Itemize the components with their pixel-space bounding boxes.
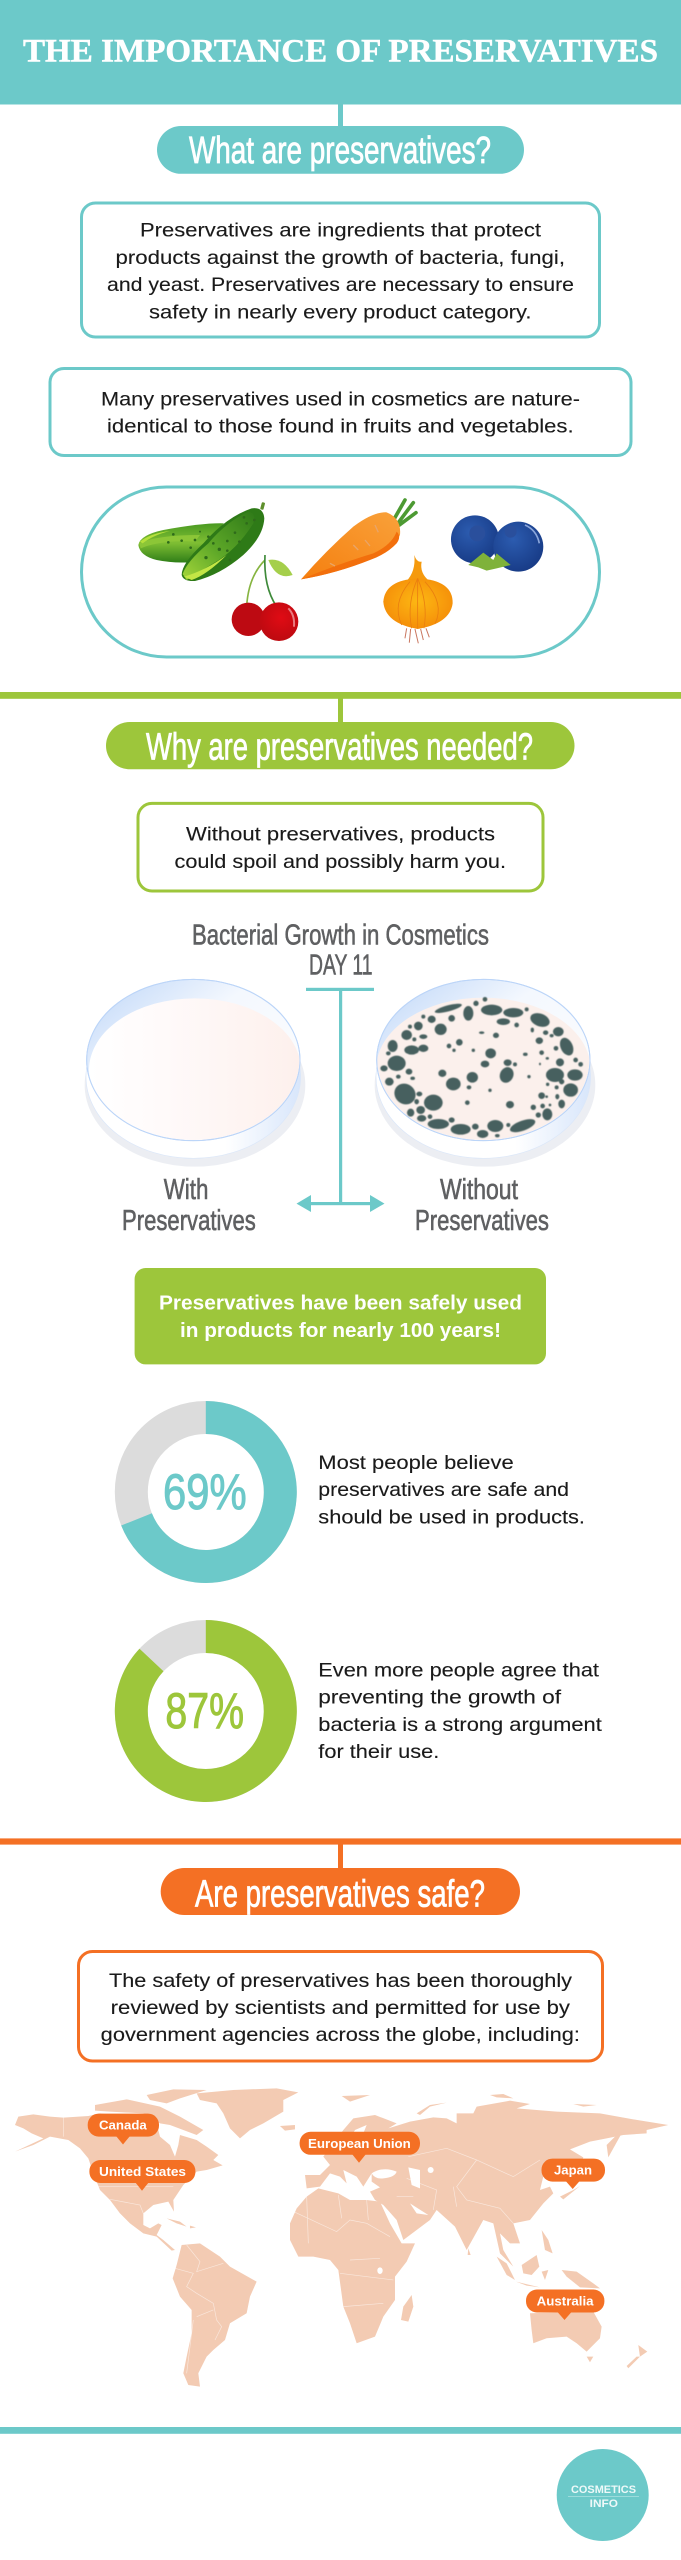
petri dish: without preservatives bbox=[375, 979, 595, 1167]
panel: definition text: Preservatives are ingredients that protect bbox=[140, 220, 542, 242]
chart heading: bacterial growth: Bacterial Growth in Cosmetics bbox=[192, 919, 489, 951]
divider: teal footer line bbox=[0, 2427, 681, 2434]
chart heading: bacterial growth bbox=[192, 919, 489, 982]
panel: definition text: products against the growth of bacteria, fungi, bbox=[116, 247, 565, 269]
icon: carrot bbox=[301, 500, 416, 579]
callout: nearly 100 years: in products for nearly 100 years! bbox=[180, 1320, 501, 1342]
text: most people believe: Most people believe bbox=[318, 1452, 514, 1474]
header banner bbox=[0, 0, 681, 104]
map: americas bbox=[15, 2088, 298, 2387]
text: even more people agree: for their use. bbox=[318, 1741, 439, 1763]
divider: green section line bbox=[0, 692, 681, 699]
section heading: why are preservatives needed bbox=[106, 698, 574, 769]
logo: cosmetics info: COSMETICS bbox=[571, 2484, 636, 2496]
text: most people believe: preservatives are safe and bbox=[318, 1479, 569, 1501]
title: THE IMPORTANCE OF PRESERVATIVES bbox=[23, 34, 658, 70]
divider: orange section line bbox=[0, 1838, 681, 1845]
panel: definition text bbox=[82, 203, 600, 337]
donut chart: 87% bbox=[115, 1620, 297, 1802]
label: with preservatives: With bbox=[164, 1174, 208, 1206]
section heading: what are preservatives bbox=[157, 104, 524, 174]
label: without preservatives bbox=[415, 1174, 549, 1237]
donut chart: 87%: 87% bbox=[165, 1683, 244, 1739]
map label: United States: United States bbox=[99, 2164, 186, 2179]
panel: spoil warning text: could spoil and possibly harm you. bbox=[174, 851, 506, 873]
panel: definition text: and yeast. Preservatives are necessary to ensure bbox=[107, 274, 574, 296]
section heading: are preservatives safe: Are preservatives safe? bbox=[195, 1874, 485, 1916]
icon: blueberries bbox=[451, 515, 543, 572]
map label: Australia bbox=[526, 2290, 604, 2320]
donut chart: 69% bbox=[121, 1401, 297, 1583]
petri dish: with preservatives bbox=[85, 979, 305, 1167]
panel: spoil warning text bbox=[138, 803, 543, 891]
section heading: what are preservatives: What are preservatives? bbox=[189, 130, 491, 172]
text: most people believe bbox=[318, 1452, 585, 1528]
label: with preservatives: Preservatives bbox=[122, 1205, 256, 1237]
map: eurasia africa oceania bbox=[290, 2094, 668, 2368]
icon: cucumbers bbox=[138, 502, 265, 581]
map label: Australia: Australia bbox=[537, 2294, 594, 2308]
callout: nearly 100 years bbox=[135, 1268, 546, 1364]
arrow: comparison divider bbox=[296, 988, 384, 1212]
panel: safety review text: reviewed by scientists and permitted for use by bbox=[111, 1997, 570, 2019]
map: inland seas bbox=[343, 2125, 434, 2274]
map label: European Union: European Union bbox=[308, 2136, 411, 2151]
panel: nature-identical text bbox=[50, 368, 631, 456]
logo: cosmetics info bbox=[557, 2449, 649, 2541]
label: without preservatives: Without bbox=[440, 1174, 518, 1206]
text: even more people agree: bacteria is a strong argument bbox=[318, 1714, 602, 1736]
chart heading: bacterial growth: DAY 11 bbox=[309, 950, 372, 982]
map label: United States bbox=[89, 2160, 195, 2191]
panel: fruits and vegetables bbox=[82, 487, 600, 657]
map label: Canada: Canada bbox=[99, 2118, 148, 2133]
section heading: why are preservatives needed: Why are preservatives needed? bbox=[146, 726, 533, 768]
text: even more people agree: preventing the growth of bbox=[318, 1687, 562, 1709]
panel: nature-identical text: identical to those found in fruits and vegetables. bbox=[107, 416, 574, 438]
icon: onion bbox=[383, 555, 453, 643]
panel: nature-identical text: Many preservatives used in cosmetics are nature- bbox=[101, 388, 580, 410]
panel: definition text: safety in nearly every product category. bbox=[149, 301, 532, 323]
map label: European Union bbox=[300, 2132, 420, 2163]
icon: cherries bbox=[232, 555, 298, 641]
text: even more people agree: Even more people agree that bbox=[318, 1660, 600, 1682]
map label: Canada bbox=[88, 2114, 159, 2144]
callout: nearly 100 years: Preservatives have been safely used bbox=[159, 1292, 522, 1314]
panel: safety review text: The safety of preservatives has been thoroughly bbox=[109, 1970, 572, 1992]
bacteria colonies bbox=[380, 997, 583, 1138]
donut chart: 69%: 69% bbox=[163, 1464, 247, 1520]
panel: safety review text: government agencies across the globe, including: bbox=[101, 2024, 580, 2046]
label: without preservatives: Preservatives bbox=[415, 1205, 549, 1237]
map label: Japan: Japan bbox=[554, 2163, 592, 2178]
panel: spoil warning text: Without preservatives, products bbox=[186, 824, 495, 846]
label: with preservatives bbox=[122, 1174, 256, 1237]
world map bbox=[15, 2088, 668, 2387]
map label: Japan bbox=[542, 2159, 605, 2189]
logo: cosmetics info: INFO bbox=[590, 2498, 618, 2510]
panel: safety review text bbox=[78, 1952, 602, 2061]
text: even more people agree bbox=[318, 1660, 602, 1763]
text: most people believe: should be used in products. bbox=[318, 1506, 585, 1528]
section heading: are preservatives safe bbox=[161, 1844, 520, 1916]
